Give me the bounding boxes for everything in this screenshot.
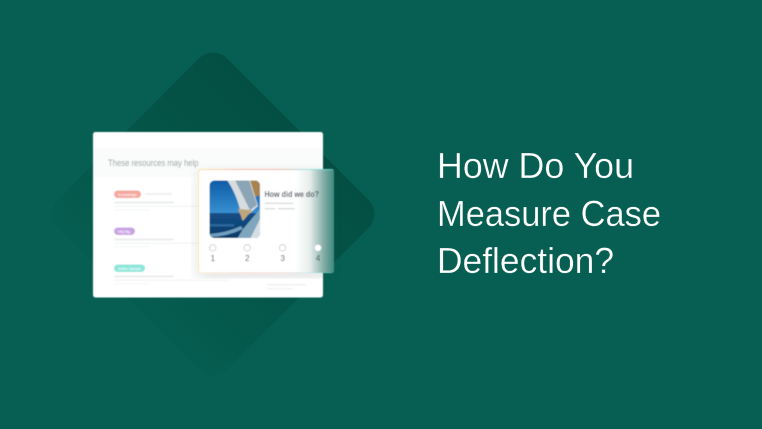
rating option 4: 4 xyxy=(316,254,321,263)
title line 3: Deflection? xyxy=(437,240,614,281)
rating option 2: 2 xyxy=(245,254,250,263)
survey question: How did we do? xyxy=(264,190,319,199)
result item: Article: Article Sample xyxy=(118,266,142,271)
title line 2: Measure Case xyxy=(437,193,661,234)
result item: Knowledge: Knowledge xyxy=(118,192,138,197)
card surface xyxy=(199,170,334,272)
title xyxy=(437,145,661,281)
panel: resources window xyxy=(93,132,323,298)
footer lines xyxy=(267,284,306,290)
window header band xyxy=(93,148,323,177)
result item: FAQ xyxy=(114,228,199,248)
rating option 1: 1 xyxy=(211,254,216,263)
result item: Knowledge xyxy=(114,190,199,210)
result item: Article xyxy=(114,264,230,284)
title line 1: How Do You xyxy=(437,145,634,186)
rating option 3: 3 xyxy=(280,254,285,263)
diamond backdrop shape xyxy=(43,44,383,384)
panel: survey card xyxy=(198,169,334,273)
card edge xyxy=(198,169,334,273)
result item: FAQ: FAQ Tag xyxy=(118,229,130,234)
question sub lines xyxy=(264,202,295,210)
photo: sailboat xyxy=(209,180,260,239)
window heading: These resources may help xyxy=(108,158,198,169)
window body xyxy=(93,132,323,298)
